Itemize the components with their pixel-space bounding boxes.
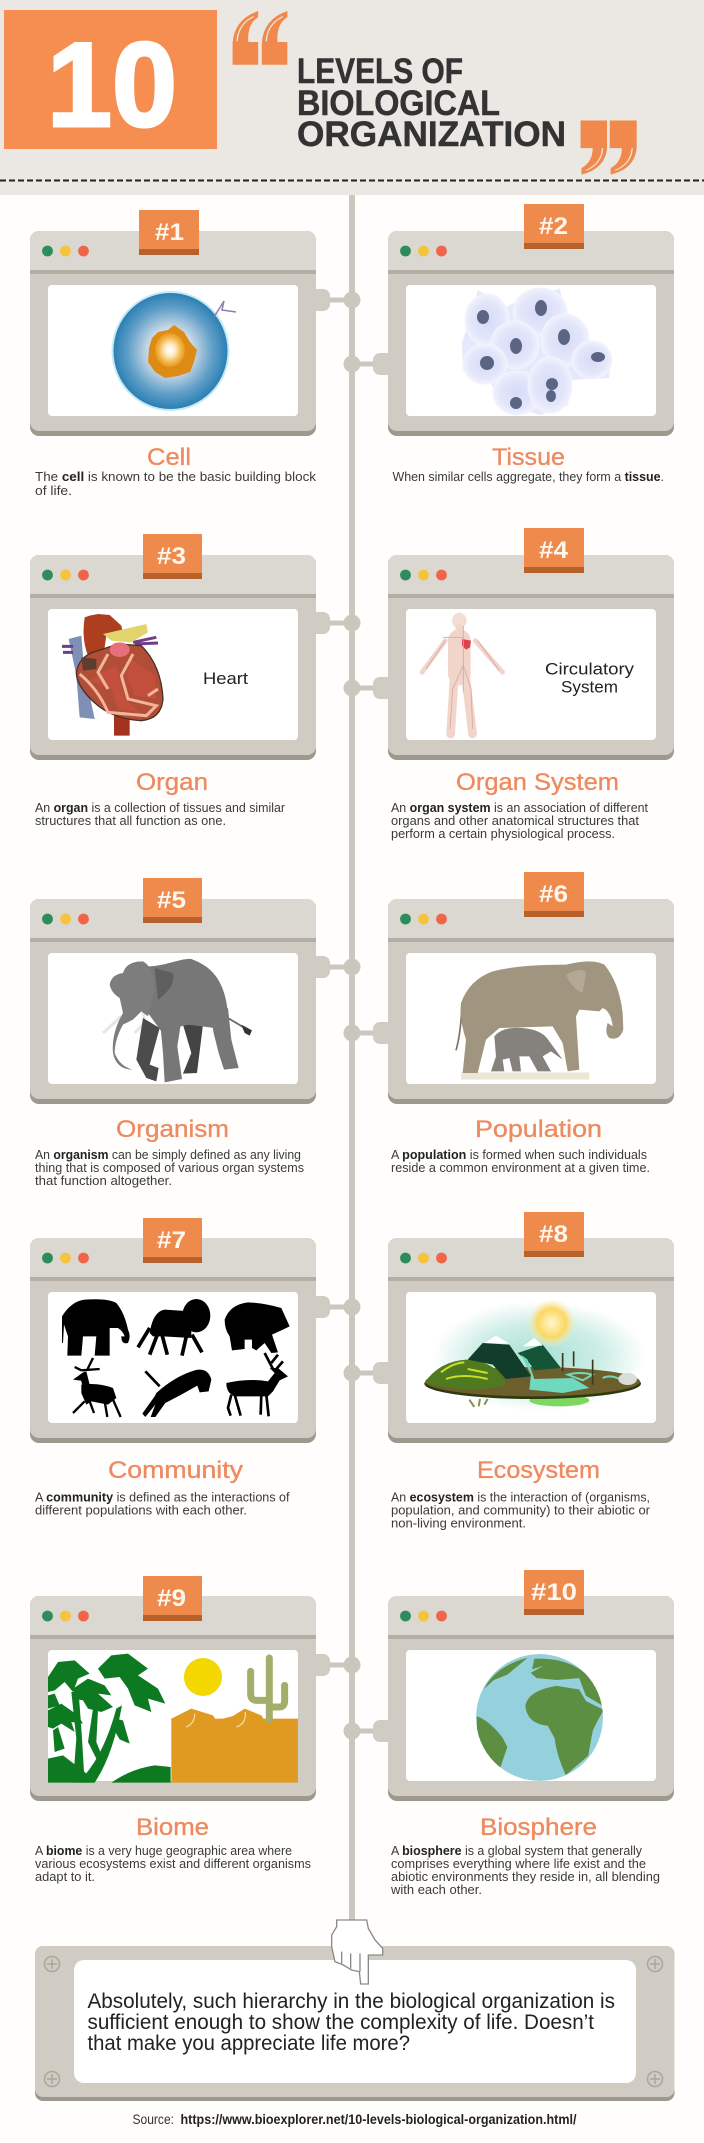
text: biosphere (390, 1843, 660, 1897)
panel: organ (30, 534, 360, 828)
badge #1 (139, 210, 199, 255)
text: biome: adapt to it. (35, 1869, 95, 1884)
orange number box (4, 10, 217, 152)
label: circulatory system (545, 660, 635, 696)
badge #8 (524, 1212, 584, 1257)
text: cell: The cell is known to be the basic building block (35, 469, 317, 484)
heading: tissue: Tissue (492, 444, 565, 471)
label: circulatory system: Circulatory (545, 660, 635, 678)
image: biome (48, 1654, 298, 1783)
text: organism: thing that is composed of various organ systems (35, 1160, 304, 1175)
image: cell (112, 291, 236, 411)
text: ecosystem (391, 1490, 651, 1530)
panel: organism (30, 878, 360, 1188)
panel: cell (30, 210, 360, 498)
badge #2 (524, 204, 584, 249)
heading: cell: Cell (147, 444, 191, 471)
panel: tissue (344, 204, 674, 484)
badge #4 (524, 528, 584, 573)
text: community (35, 1490, 290, 1518)
text: organ: An organ is a collection of tissues and similar (35, 800, 286, 815)
badge #10: #10 (531, 1579, 577, 1606)
title (297, 52, 566, 154)
label: circulatory system: System (561, 678, 618, 696)
conclusion text: that make you appreciate life more? (88, 2032, 410, 2055)
badge #8: #8 (539, 1221, 568, 1248)
icons: corner screws (44, 1956, 662, 2086)
image: ecosystem (424, 1299, 646, 1411)
text: population: reside a common environment at a given time. (391, 1160, 650, 1175)
badge #7 (143, 1218, 202, 1263)
text: organ system: An organ system is an association of different (391, 800, 648, 815)
title: BIOLOGICAL (297, 84, 500, 123)
text: organ (35, 800, 286, 828)
badge #2: #2 (539, 213, 568, 240)
badge #3 (143, 534, 202, 579)
text: population: A population is formed when such individuals (391, 1147, 647, 1162)
image: elephants (456, 961, 623, 1080)
timeline (349, 195, 355, 1920)
image: globe (476, 1654, 604, 1781)
text: biosphere: comprises everything where life exist and the (391, 1856, 646, 1871)
panel: ecosystem (344, 1212, 674, 1530)
text: population (391, 1147, 650, 1175)
badge #9: #9 (157, 1585, 186, 1612)
panel: community (30, 1218, 360, 1518)
heading: organ system: Organ System (456, 769, 619, 796)
image: tissue (462, 288, 612, 415)
image: animal silhouettes (62, 1299, 290, 1417)
text: organ system: perform a certain physiological process. (391, 826, 615, 841)
text: organism: that function altogether. (35, 1173, 172, 1188)
badge #10 (524, 1570, 584, 1615)
badge #3: #3 (157, 543, 186, 570)
panel: conclusion (35, 1946, 674, 2101)
text: biosphere: with each other. (390, 1882, 482, 1897)
text: ecosystem: population, and community) to their abiotic or (391, 1502, 651, 1518)
image: elephant (103, 959, 252, 1082)
text: biome: A biome is a very huge geographic area where (35, 1843, 292, 1858)
text: organism: An organism can be simply defined as any living (35, 1147, 301, 1162)
text: biome (35, 1843, 311, 1884)
panel: biome (30, 1576, 360, 1884)
orange number box: 10 (47, 18, 177, 152)
heading: biosphere: Biosphere (480, 1814, 597, 1841)
label: heart: Heart (203, 669, 248, 688)
text: biosphere: A biosphere is a global system that generally (391, 1843, 642, 1858)
badge #5 (143, 878, 202, 923)
source line: Source: (132, 2112, 174, 2127)
text: biome: various ecosystems exist and different organisms (35, 1856, 311, 1871)
conclusion text: sufficient enough to show the complexity of life. Doesn’t (88, 2011, 594, 2034)
badge #6: #6 (539, 881, 568, 908)
source line: https://www.bioexplorer.net/10-levels-biological-organization.html/ (180, 2112, 577, 2127)
heading: biome: Biome (136, 1814, 209, 1841)
text: community: A community is defined as the interactions of (35, 1490, 290, 1504)
text: organ: structures that all function as one. (35, 813, 226, 828)
heading: organ: Organ (136, 769, 208, 796)
text: biosphere: abiotic environments they reside in, all blending (391, 1869, 660, 1884)
heading: ecosystem: Ecosystem (477, 1457, 600, 1484)
text: community: different populations with each other. (35, 1502, 247, 1518)
panel: biosphere (344, 1570, 674, 1897)
badge #7: #7 (157, 1227, 186, 1254)
icon: opening quote (233, 11, 287, 65)
badge #4: #4 (539, 537, 569, 564)
badge #5: #5 (157, 887, 186, 914)
badge #9 (143, 1576, 202, 1621)
text: ecosystem: An ecosystem is the interaction of (organisms, (391, 1490, 650, 1504)
text: organ system: organs and other anatomical structures that (391, 813, 639, 828)
title: LEVELS OF (297, 52, 463, 91)
panel: organ system (344, 528, 674, 841)
text: cell: of life. (35, 483, 72, 498)
conclusion text (88, 1990, 615, 2055)
image: circulatory system (422, 613, 503, 734)
text: tissue: When similar cells aggregate, they form a tissue. (392, 469, 664, 484)
text: cell (35, 469, 317, 498)
panel: population (344, 872, 674, 1175)
conclusion text: Absolutely, such hierarchy in the biological organization is (88, 1990, 615, 2013)
title: ORGANIZATION (297, 115, 566, 154)
badge #1: #1 (155, 219, 184, 246)
text: organ system (391, 800, 648, 841)
text: ecosystem: non-living environment. (391, 1516, 526, 1530)
heading: organism: Organism (116, 1116, 229, 1143)
text: organism (35, 1147, 304, 1188)
header (0, 0, 704, 195)
heading: community: Community (108, 1457, 243, 1484)
badge #6 (524, 872, 584, 917)
icon: closing quote (581, 121, 637, 175)
image: heart (62, 614, 163, 736)
heading: population: Population (475, 1116, 602, 1143)
icon: pointing hand (332, 1920, 383, 1984)
